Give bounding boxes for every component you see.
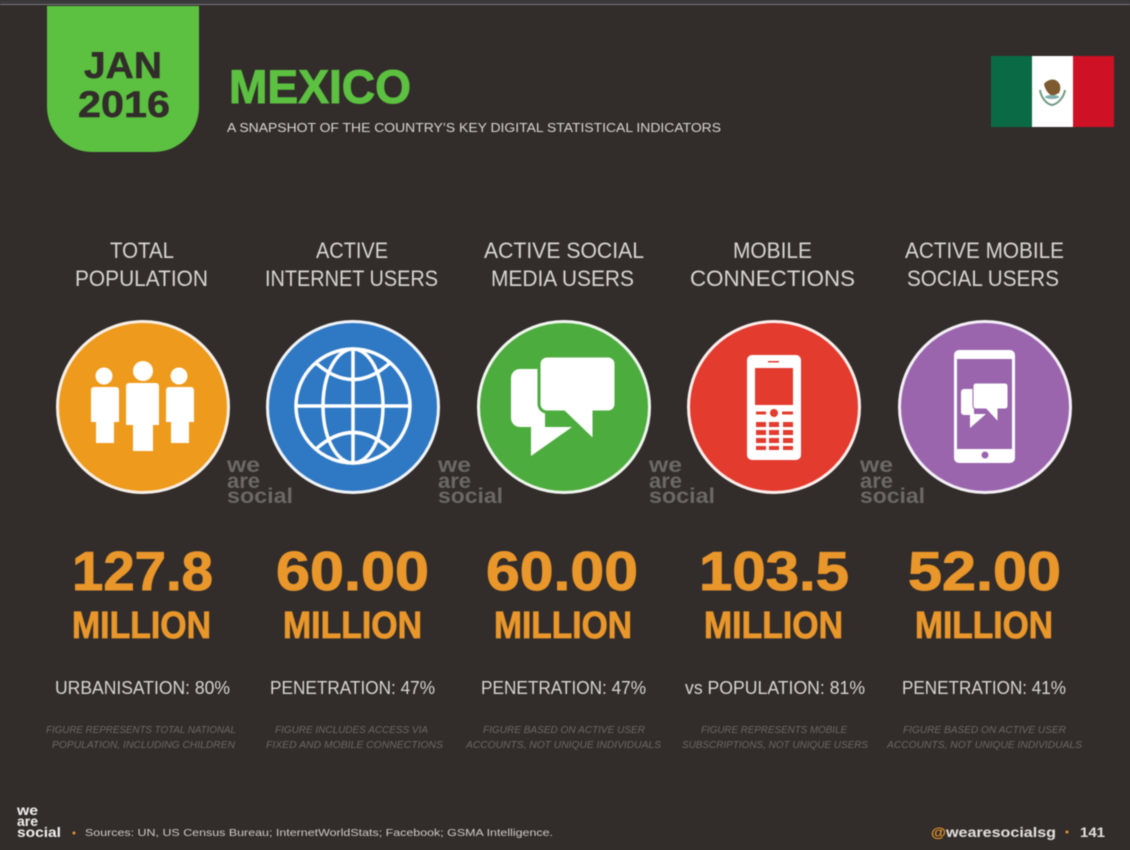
- heading: active social media users: [484, 238, 644, 291]
- footer logo: [16, 802, 61, 840]
- footer sources: Sources: UN, US Census Bureau; InternetWorldStats; Facebook; GSMA Intelligence.: [85, 827, 553, 839]
- heading: mobile connections: [690, 238, 855, 291]
- watermark: we are social 4: social: [860, 485, 925, 508]
- date tab: JAN: [84, 45, 162, 86]
- footnote: internet users: FIGURE INCLUDES ACCESS VIA: [275, 725, 428, 736]
- watermark: we are social 4: [859, 454, 925, 508]
- panel: active social media users: [465, 238, 661, 751]
- watermark: we are social 3: we: [648, 454, 682, 477]
- icon: smartphone with speech bubbles: [900, 322, 1070, 492]
- value: 127.8 million: MILLION: [72, 605, 211, 647]
- date tab: [47, 6, 199, 152]
- date tab: 2016: [78, 84, 170, 125]
- panel: mobile connections: [682, 238, 868, 751]
- icon: speech bubbles: [478, 322, 650, 492]
- panel: active internet users: [265, 238, 443, 751]
- icon: people: [58, 322, 228, 492]
- heading: active internet users: ACTIVE: [316, 238, 388, 263]
- footer handle and page number: @: [931, 824, 946, 840]
- value: 52.00 million: [908, 540, 1061, 647]
- subtitle: A SNAPSHOT OF THE COUNTRY’S KEY DIGITAL STATISTICAL INDICATORS: [227, 120, 721, 135]
- watermark: we are social 3: [648, 454, 715, 508]
- heading: total population: POPULATION: [75, 266, 208, 291]
- heading: mobile connections: MOBILE: [733, 238, 812, 263]
- value: 103.5 million: 103.5: [699, 540, 849, 602]
- value: 60.00 million: [276, 540, 429, 647]
- watermark: we are social 3: are: [649, 470, 682, 493]
- watermark: we are social 1: we: [226, 454, 260, 477]
- watermark: we are social 2: social: [438, 485, 503, 508]
- stat: penetration: PENETRATION: 41%: [902, 678, 1066, 698]
- heading: mobile connections: CONNECTIONS: [690, 266, 855, 291]
- watermark: we are social 1: are: [227, 470, 260, 493]
- stat: penetration: PENETRATION: 47%: [270, 678, 435, 698]
- footer handle and page number: 141: [1080, 824, 1105, 840]
- heading: active social media users: MEDIA USERS: [491, 266, 634, 291]
- footnote: social media users: FIGURE BASED ON ACTIVE USER: [483, 725, 645, 736]
- footnote: mobile connections: [682, 725, 868, 751]
- footnote: internet users: FIXED AND MOBILE CONNECTIONS: [266, 740, 443, 751]
- watermark: we are social 1: [226, 454, 293, 508]
- watermark: we are social 2: we: [437, 454, 471, 477]
- footnote: internet users: [266, 725, 443, 751]
- footnote: population: FIGURE REPRESENTS TOTAL NATIONAL: [46, 725, 236, 736]
- footer handle and page number: wearesocialsg: [945, 824, 1056, 840]
- value: 60.00 million: 60.00: [276, 540, 429, 602]
- footer handle and page number: [931, 824, 1105, 840]
- value: 60.00 million: MILLION: [494, 605, 632, 647]
- watermark: we are social 4: we: [859, 454, 893, 477]
- heading: active mobile social users: [905, 238, 1064, 291]
- value: 60.00 million: 60.00: [486, 540, 638, 602]
- footnote: mobile connections: FIGURE REPRESENTS MOBILE: [701, 725, 847, 736]
- value: 127.8 million: [72, 540, 213, 647]
- watermark: we are social 2: are: [438, 470, 471, 493]
- icon: Mexican flag: [991, 56, 1114, 127]
- footnote: population: [46, 725, 236, 751]
- stat: penetration: PENETRATION: 47%: [481, 678, 646, 698]
- watermark: we are social 2: [437, 454, 503, 508]
- watermark: we are social 3: social: [649, 485, 715, 508]
- heading: active mobile social users: SOCIAL USERS: [907, 266, 1059, 291]
- heading: active internet users: [265, 238, 438, 291]
- footnote: mobile social users: [886, 725, 1082, 751]
- watermark: we are social 1: social: [227, 485, 293, 508]
- watermark: we are social 4: are: [860, 470, 893, 493]
- stat: urbanisation: URBANISATION: 80%: [55, 678, 230, 698]
- value: 52.00 million: 52.00: [908, 540, 1061, 602]
- value: 103.5 million: MILLION: [704, 605, 843, 647]
- value: 103.5 million: [699, 540, 849, 647]
- value: 127.8 million: 127.8: [72, 540, 213, 602]
- footnote: mobile social users: FIGURE BASED ON ACTIVE USER: [903, 725, 1066, 736]
- heading: active mobile social users: ACTIVE MOBILE: [905, 238, 1064, 263]
- icon: globe: [268, 322, 438, 492]
- heading: total population: [75, 238, 208, 291]
- footnote: social media users: ACCOUNTS, NOT UNIQUE INDIVIDUALS: [465, 740, 661, 751]
- footer logo: are: [17, 813, 38, 829]
- heading: total population: TOTAL: [110, 238, 174, 263]
- footer logo: social: [17, 824, 61, 840]
- heading: active internet users: INTERNET USERS: [265, 266, 438, 291]
- footnote: population: POPULATION, INCLUDING CHILDREN: [52, 740, 236, 751]
- footer logo: we: [16, 802, 38, 818]
- icon: mobile phone: [688, 322, 860, 492]
- value: 60.00 million: [486, 540, 638, 647]
- footnote: mobile social users: ACCOUNTS, NOT UNIQUE INDIVIDUALS: [886, 740, 1082, 751]
- value: 52.00 million: MILLION: [915, 605, 1053, 647]
- title: MEXICO: [229, 60, 411, 113]
- stat: versus population: vs POPULATION: 81%: [685, 678, 865, 698]
- heading: active social media users: ACTIVE SOCIAL: [484, 238, 644, 263]
- panel: active mobile social users: [886, 238, 1082, 751]
- footnote: mobile connections: SUBSCRIPTIONS, NOT UNIQUE USERS: [682, 740, 868, 751]
- panel: total population: [46, 238, 236, 751]
- value: 60.00 million: MILLION: [283, 605, 422, 647]
- footnote: social media users: [465, 725, 661, 751]
